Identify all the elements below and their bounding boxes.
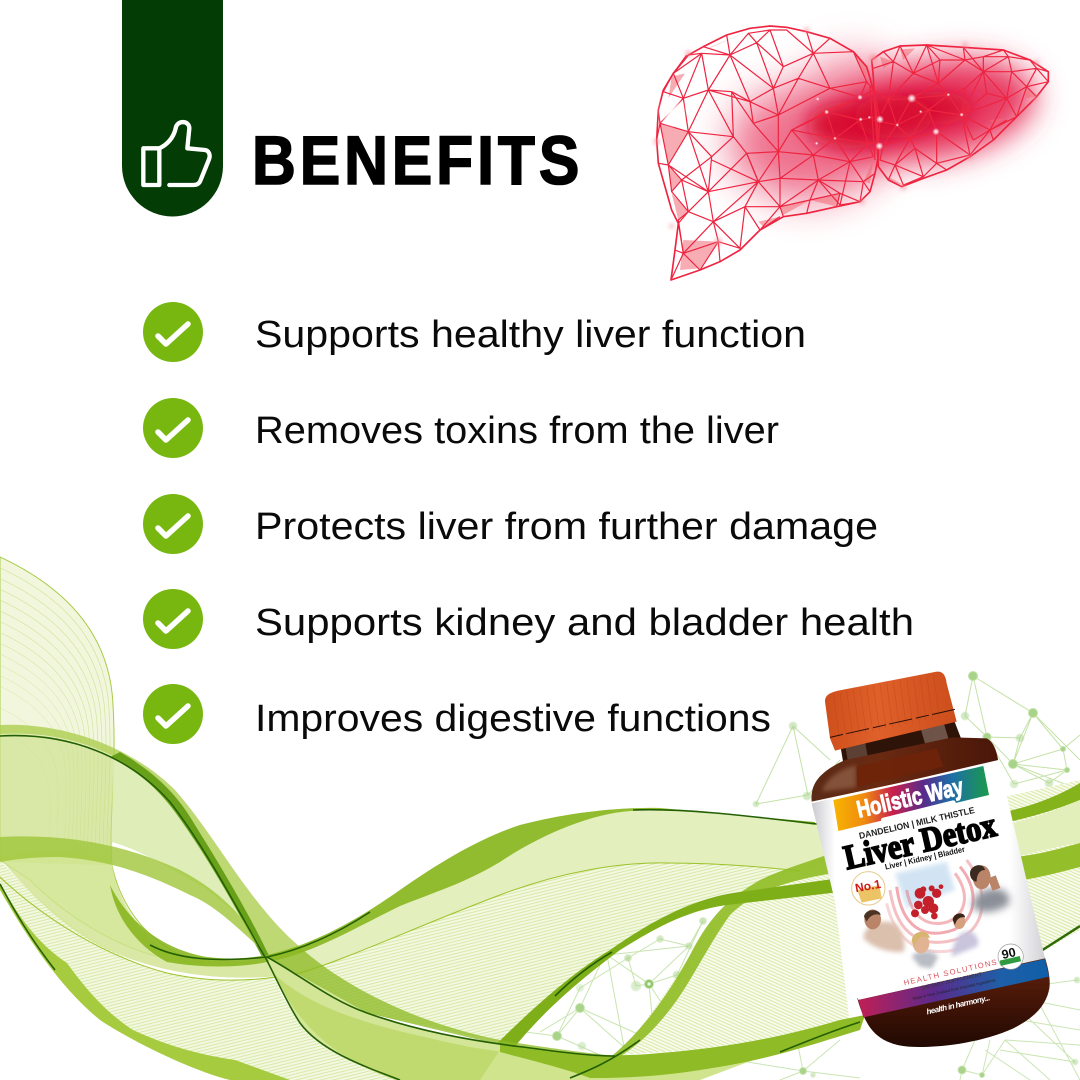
ribbon: right sheer lens	[267, 808, 840, 1042]
liver light points	[654, 27, 1039, 245]
benefit 5	[143, 684, 771, 744]
liver glow	[730, 43, 1044, 200]
benefit 2	[143, 398, 779, 458]
icon: thumbs up	[143, 122, 210, 185]
benefit text 5: Improves digestive functions	[255, 698, 771, 740]
label colour header	[833, 766, 989, 831]
icon: check 5	[143, 684, 203, 744]
ribbon: bands falling from crossing to the right	[267, 947, 620, 1062]
benefit 1	[143, 302, 806, 362]
ribbon: top-left band	[0, 725, 300, 958]
bottle cap	[825, 672, 957, 751]
person: man in shirt	[863, 909, 904, 952]
product bottle	[811, 672, 1050, 1047]
dietary supplement text: DIETARY SUPPLEMENT	[921, 972, 983, 991]
ribbon: dark edge lines	[0, 736, 860, 1080]
ribbon: right side above the bottle	[990, 780, 1080, 960]
benefit text 1: Supports healthy liver function	[255, 314, 806, 356]
title: BENEFITS	[252, 121, 579, 199]
network pattern: bottom centre	[525, 918, 706, 1055]
liver illustration	[654, 26, 1048, 280]
brand name: Holistic Way	[854, 773, 966, 824]
origin text: Made in New Zealand from Imported Ingredients	[912, 977, 996, 1001]
ribbon: bottom-left band	[0, 883, 290, 1080]
product sub-title: DANDELION | MILK THISTLE	[858, 805, 976, 841]
ribbon: long wave band	[110, 808, 815, 966]
product name: Liver Detox	[840, 806, 1000, 877]
ribbon: shaded sheer between loop and crossing	[0, 852, 290, 978]
network pattern: top right behind bottle	[753, 672, 1080, 807]
ribbon: right hatched sheer	[617, 860, 850, 1055]
ribbon: bottom band	[500, 1015, 865, 1078]
icon: check 4	[143, 589, 203, 649]
bottle shoulder glass	[811, 737, 998, 802]
bottle label	[812, 760, 1045, 1000]
ribbon: second band rising to the bottle	[460, 878, 840, 1080]
person: woman centre	[912, 932, 938, 968]
wave ribbons	[0, 557, 1080, 1080]
ribbon: thin lower arc line	[0, 863, 840, 980]
tablet count seal	[998, 944, 1023, 969]
badge No.1	[852, 872, 885, 905]
icon: check 3	[143, 494, 203, 554]
ribbon: horizontal band across the loop	[0, 836, 262, 950]
ribbon: dark core of top-left band	[110, 752, 270, 958]
brand swoosh	[883, 803, 953, 820]
ribbon: pale fill under crossing	[267, 957, 530, 1080]
ribbon: strip at bottom centre	[480, 1050, 780, 1080]
liver shaded facets	[660, 32, 1037, 270]
ribbon: top-left sheer loop	[0, 557, 205, 962]
benefit text 2: Removes toxins from the liver	[255, 410, 779, 452]
slogan: health in harmony...	[926, 993, 991, 1016]
icon: check 2	[143, 398, 203, 458]
network pattern: bottom right	[735, 977, 1080, 1080]
ribbon: pale sheer under the top band	[112, 757, 250, 925]
ribbon: hatched inner sheer with thin edge	[300, 863, 840, 1042]
organs line: Liver | Kidney | Bladder	[884, 845, 966, 872]
ribbon: S-curve band	[604, 850, 840, 1062]
ribbon: lower band under crossing	[275, 975, 540, 1080]
benefit text 4: Supports kidney and bladder health	[255, 602, 914, 644]
health solutions text: HEALTH SOLUTIONS	[903, 958, 997, 987]
benefit text 3: Protects liver from further damage	[255, 506, 878, 548]
tablet count seal: 90	[1000, 945, 1017, 962]
header tab	[122, 0, 223, 216]
bottle neck	[840, 718, 962, 763]
benefit 4	[143, 589, 914, 649]
benefit 3	[143, 494, 878, 554]
person: man on phone	[970, 865, 1009, 912]
benefits list	[143, 302, 914, 744]
liver outline and mesh	[657, 26, 1048, 280]
badge No.1: No.1	[854, 877, 882, 895]
person: woman right	[952, 913, 978, 957]
label footer strip	[858, 959, 1049, 1017]
ribbon: big pale sheer at lower left	[0, 860, 400, 1080]
bottle base glass	[857, 958, 1050, 1047]
icon: check 1	[143, 302, 203, 362]
label artwork: swirl and liver cells	[887, 860, 982, 952]
